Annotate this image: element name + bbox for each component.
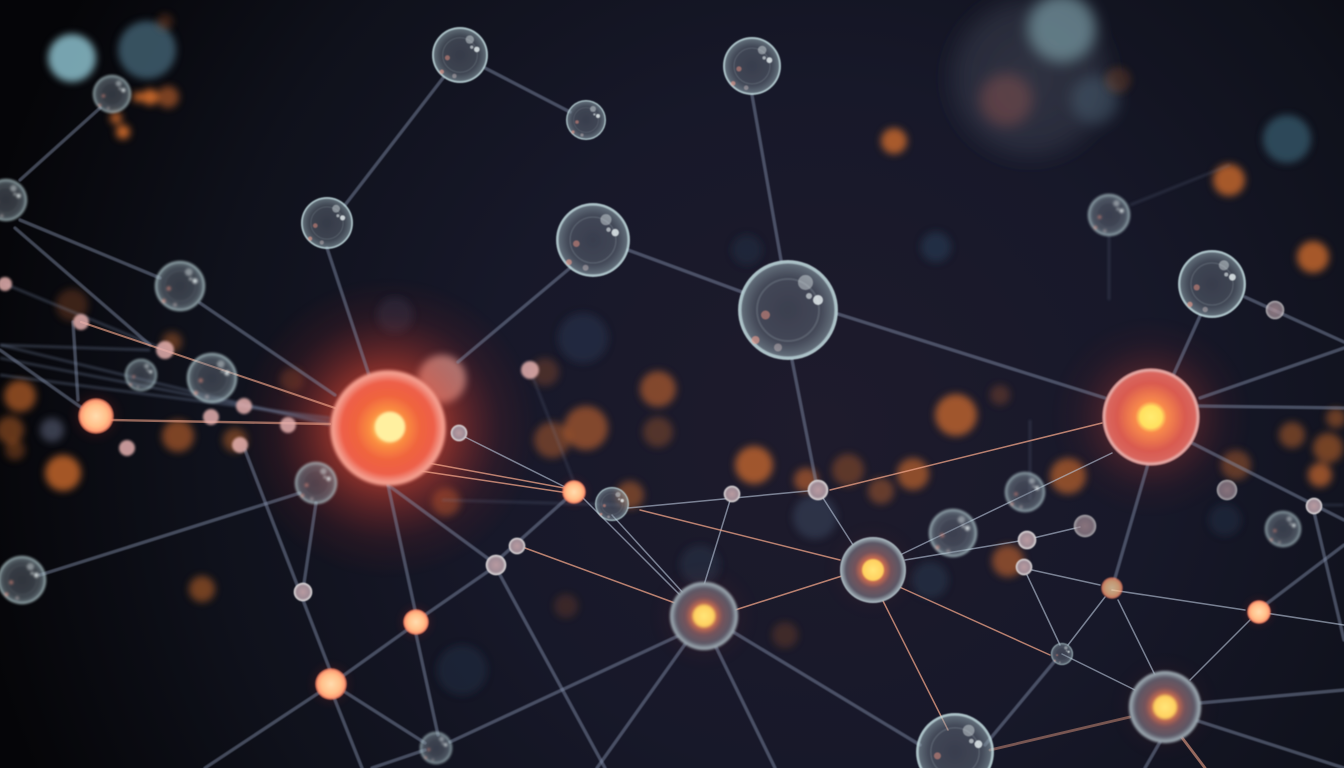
network edges: orange links (81, 322, 1205, 768)
small pink nodes, defocused (0, 277, 539, 456)
in-focus glass nodes (301, 27, 1246, 768)
left fan of blurred links (0, 284, 330, 425)
network edges: thin bright links (465, 437, 1344, 690)
large hazy sphere (938, 0, 1122, 170)
glowing spark nodes (78, 398, 1271, 700)
hazy far edges (442, 165, 1344, 505)
glow halos (66, 278, 1279, 762)
left hot node (329, 369, 447, 487)
right hot node (1102, 368, 1200, 466)
small pearl nodes, in focus (294, 301, 1322, 601)
ringed core nodes (670, 537, 1201, 743)
